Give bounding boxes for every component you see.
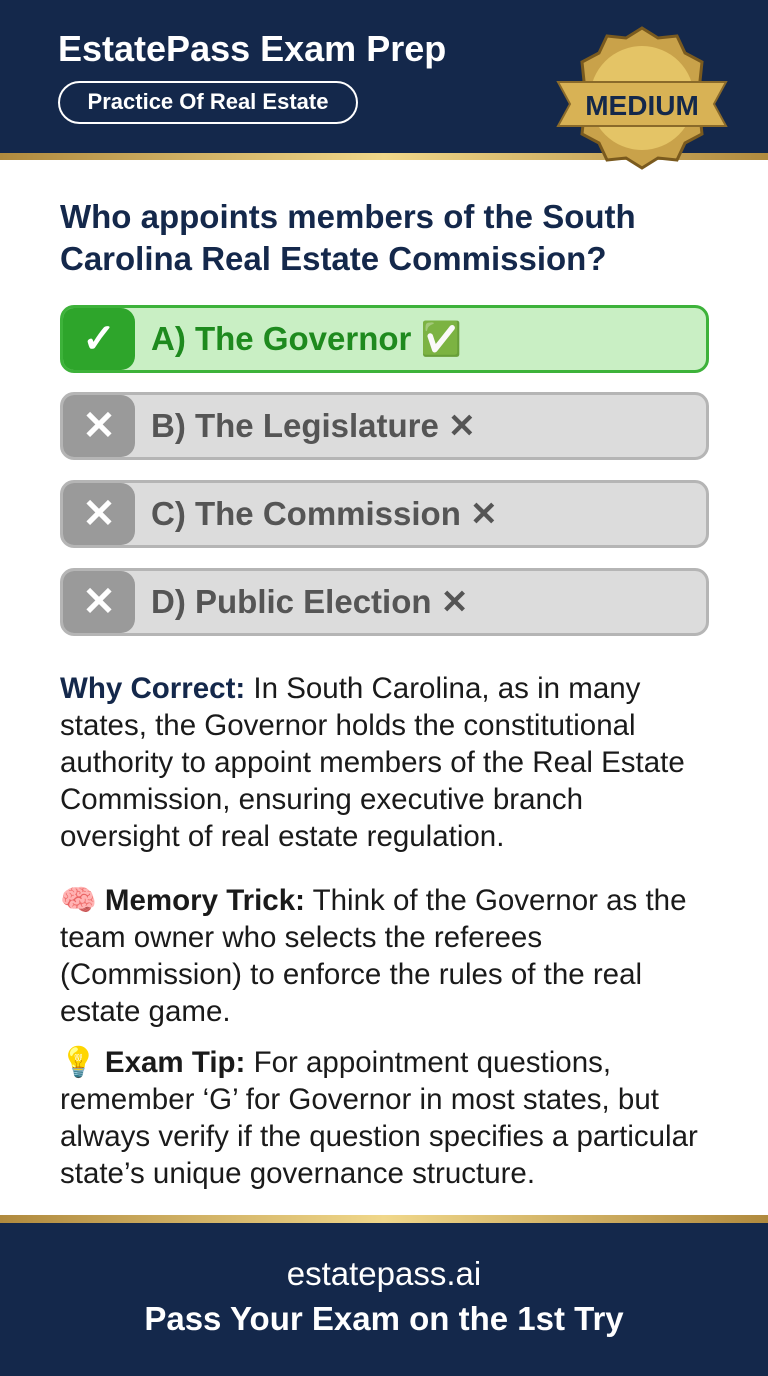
exam tip: always verify if the question specifies a particular bbox=[60, 1120, 698, 1153]
option B bbox=[60, 392, 709, 460]
option B: ✕ bbox=[82, 404, 116, 448]
option B: B) The Legislature ✕ bbox=[151, 407, 476, 444]
option D: D) Public Election ✕ bbox=[151, 583, 468, 620]
gold line top bbox=[0, 153, 768, 160]
why correct: states, the Governor holds the constitutional bbox=[60, 709, 636, 742]
why correct bbox=[60, 672, 685, 853]
category pill: Practice Of Real Estate bbox=[88, 89, 328, 114]
header bbox=[0, 0, 768, 155]
option C: C) The Commission ✕ bbox=[151, 495, 498, 532]
option A correct bbox=[60, 305, 709, 373]
memory trick bbox=[60, 884, 686, 1028]
title: EstatePass Exam Prep bbox=[58, 28, 446, 69]
option A correct: ✓ bbox=[82, 317, 116, 361]
category pill bbox=[58, 81, 358, 124]
option D: ✕ bbox=[82, 580, 116, 624]
why correct: oversight of real estate regulation. bbox=[60, 820, 504, 853]
badge: medium bbox=[556, 26, 728, 170]
why correct: Why Correct: In South Carolina, as in many bbox=[60, 672, 640, 705]
exam tip bbox=[60, 1046, 698, 1190]
badge: medium: MEDIUM bbox=[585, 90, 699, 121]
memory trick: 🧠 Memory Trick: Think of the Governor as the bbox=[60, 884, 686, 917]
option C: ✕ bbox=[82, 492, 116, 536]
why correct: authority to appoint members of the Real Estate bbox=[60, 746, 685, 779]
memory trick: (Commission) to enforce the rules of the real bbox=[60, 958, 642, 991]
exam tip: 💡 Exam Tip: For appointment questions, bbox=[60, 1046, 611, 1079]
memory trick: team owner who selects the referees bbox=[60, 921, 542, 954]
question: Who appoints members of the South Carolina Real Estate Commission? bbox=[60, 198, 636, 277]
memory trick: estate game. bbox=[60, 995, 231, 1028]
gold line bottom bbox=[0, 1215, 768, 1223]
option A correct: A) The Governor ✅ bbox=[151, 320, 462, 357]
exam tip: state’s unique governance structure. bbox=[60, 1157, 535, 1190]
why correct: Commission, ensuring executive branch bbox=[60, 783, 583, 816]
option C bbox=[60, 480, 709, 548]
option D bbox=[60, 568, 709, 636]
footer url: estatepass.ai bbox=[287, 1255, 481, 1292]
footer bbox=[0, 1223, 768, 1376]
footer tagline: Pass Your Exam on the 1st Try bbox=[144, 1300, 624, 1337]
exam tip: remember ‘G’ for Governor in most states, but bbox=[60, 1083, 659, 1116]
